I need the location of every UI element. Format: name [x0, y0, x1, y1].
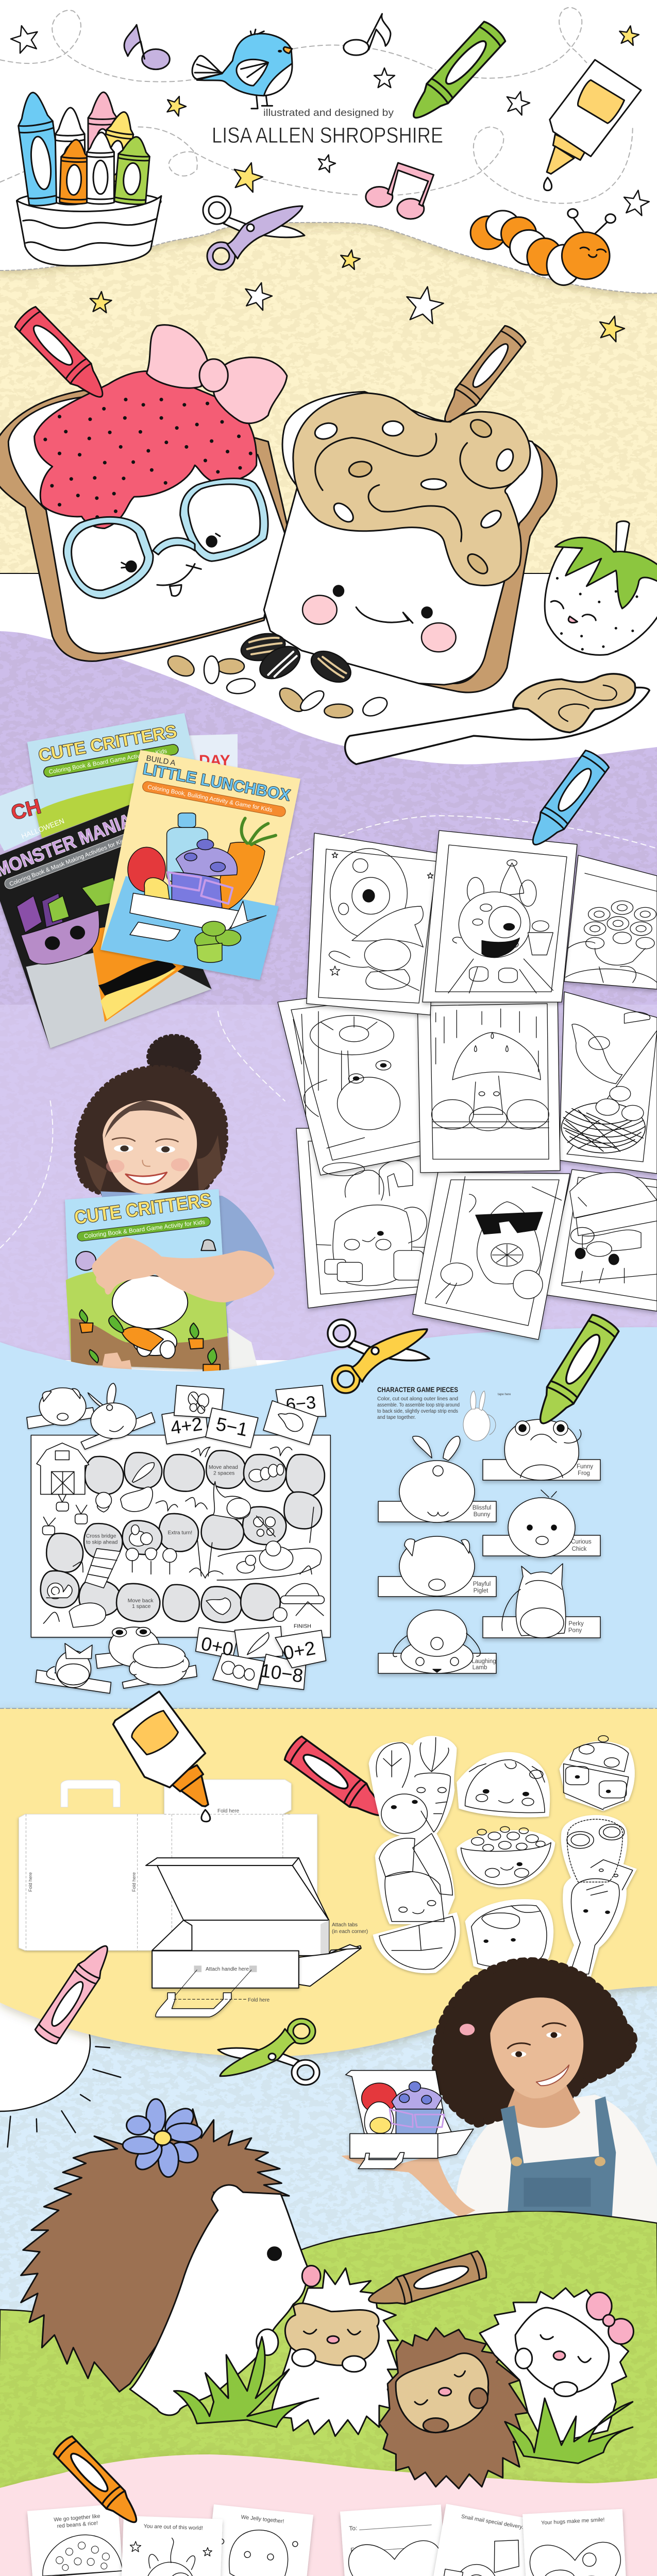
board text labels: Move ahead — [209, 1465, 238, 1470]
strawberry — [545, 547, 657, 655]
photo: girl with lunchbox — [342, 1961, 657, 2225]
piece labels: Chick — [572, 1546, 587, 1552]
light blue sky panel — [0, 1958, 657, 2329]
piece labels: Funny — [577, 1464, 593, 1470]
math cards top — [162, 1385, 326, 1448]
piece labels: Frog — [578, 1470, 590, 1477]
piece: laughing lamb — [378, 1610, 496, 1673]
icon: green scissors — [218, 2019, 319, 2085]
valentine card: bowl of beans: We go together like — [54, 2513, 100, 2523]
book title: christmas fragment: CH — [9, 795, 43, 825]
shirt — [454, 2095, 657, 2225]
piece labels: Lamb — [473, 1665, 487, 1671]
hair — [436, 1961, 633, 2124]
board text labels: Extra turn! — [167, 1530, 192, 1536]
nuts on spread — [311, 418, 516, 575]
dashed wave edge — [0, 223, 657, 293]
photo: girl holding coloring book — [65, 1036, 275, 1372]
net fold labels — [28, 1808, 240, 1892]
white sun — [0, 1974, 121, 2147]
hedgehog family — [21, 2099, 633, 2488]
box annotations: Fold here — [248, 1997, 270, 2003]
game character: lamb — [122, 1644, 197, 1688]
board background — [31, 1435, 330, 1637]
card: 6-3 — [276, 1385, 326, 1416]
hair tie — [460, 2024, 475, 2036]
skirt — [228, 1328, 258, 1369]
board game sheet — [27, 1383, 330, 1637]
board text labels: Move back — [128, 1598, 154, 1604]
books: stacked covers — [0, 713, 238, 1048]
board text labels: FINISH — [294, 1624, 311, 1630]
board text labels: 2 spaces — [213, 1471, 234, 1477]
spread swirls — [315, 434, 511, 541]
instructions text: and tape together. — [377, 1414, 416, 1420]
board text labels: Cross bridge — [86, 1534, 116, 1539]
box annotations: Attach tabs — [332, 1922, 358, 1928]
strawberry jam — [35, 371, 257, 529]
lighter purple lower wash — [0, 1005, 657, 1360]
icon: pink double music note — [366, 163, 434, 219]
crayon: orange — [52, 2434, 145, 2530]
blue flower — [123, 2099, 202, 2177]
table edge line — [0, 573, 657, 574]
board text labels — [52, 1464, 311, 1630]
piece labels: Pony — [568, 1628, 582, 1634]
board line art — [37, 1443, 324, 1628]
valentine card: jellyfish: We Jelly together! — [241, 2514, 284, 2524]
stars — [8, 22, 651, 343]
pop tart — [591, 1860, 633, 1890]
valentine card: monster — [119, 2516, 231, 2576]
book title: monster mania: HALLOWEEN — [20, 817, 65, 840]
piece labels: Playful — [473, 1581, 491, 1587]
piece labels: Curious — [571, 1539, 592, 1545]
icon: glue bottle big — [113, 1691, 210, 1822]
book title: little lunchbox: BUILD A — [145, 754, 176, 768]
grass and basket — [43, 1447, 312, 1623]
shirt — [100, 1191, 275, 1333]
game character: bunny with band — [81, 1383, 155, 1449]
seeds and nuts — [163, 632, 649, 764]
valentine card: bowl of beans: red beans & rice! — [57, 2520, 98, 2530]
face — [490, 1997, 583, 2098]
game pieces column — [378, 1419, 600, 1673]
toast with glasses — [567, 1819, 622, 1882]
box annotations: Attach handle here — [206, 1967, 249, 1972]
icon: lilac music note — [124, 25, 170, 70]
piece labels — [471, 1464, 593, 1671]
held book — [65, 1189, 229, 1370]
book text: cute critters on held book — [73, 1189, 213, 1242]
arm and hand — [342, 2155, 476, 2217]
card: 6-3: 6−3 — [285, 1393, 317, 1415]
flowers and bridge — [85, 1507, 314, 1588]
dashed divider blue to yellow — [0, 1708, 657, 1709]
drumstick — [570, 1878, 619, 1974]
crayon: brown on toast — [436, 324, 527, 430]
sticker backs — [369, 1736, 637, 1977]
valentine card: jellyfish — [200, 2504, 328, 2576]
lunchbox paper net — [19, 1780, 317, 1951]
book title: cute critters: CUTE CRITTERS — [37, 721, 178, 766]
cream background top section — [0, 206, 657, 582]
green hill — [0, 2211, 657, 2530]
crayon: red big — [283, 1735, 392, 1825]
card texts bottom: 0+2 — [281, 1637, 317, 1664]
game character: pig with band — [27, 1388, 95, 1429]
mother hedgehog spines — [21, 2109, 289, 2392]
piece: funny frog — [483, 1419, 600, 1480]
valentine card: blank heart: From: — [350, 2546, 367, 2554]
jam seeds — [45, 400, 250, 517]
hen, chick and puppy — [96, 1482, 250, 1519]
3d lunchbox model — [146, 1858, 329, 1956]
valentine cards group one — [27, 2504, 328, 2576]
coloring sheet: santa — [545, 1170, 657, 1311]
net fold labels: Fold here — [28, 1872, 33, 1892]
icon: top decorations (notes, bird, glue, caterpillar, cup) — [17, 14, 434, 219]
icon: green crayon — [405, 20, 507, 128]
crayon: big green — [529, 1313, 620, 1432]
coloring sheets collage — [278, 831, 657, 1340]
toast pair illustration — [0, 325, 657, 692]
pink bow on baby — [586, 2292, 633, 2344]
grass tufts — [174, 2337, 633, 2463]
icon: yellow scissors — [328, 1319, 429, 1393]
pill: held book subtitle: Coloring Book & Board Game Activity for Kids — [83, 1218, 206, 1240]
net main panel — [19, 1780, 317, 1951]
valentine card: bowl of beans — [27, 2504, 129, 2576]
crayon: red on toast — [13, 305, 113, 405]
purple background panel — [0, 631, 657, 1360]
coloring sheet: party monster — [423, 831, 577, 1002]
sticker line art — [376, 1736, 633, 1974]
left toast bread — [8, 397, 285, 653]
instructions text: assemble. To assemble loop strip around — [377, 1402, 460, 1408]
icon: lilac scissors — [203, 196, 305, 270]
coloring sheet: cocoa mug — [296, 1128, 443, 1308]
food stickers — [369, 1736, 637, 1977]
carrots near barn — [43, 1502, 87, 1535]
right toast crust — [419, 442, 557, 692]
baby white hedgehog — [272, 2268, 398, 2436]
coloring sheet: frog — [278, 984, 421, 1176]
held mini lunchbox — [346, 2071, 474, 2168]
box annotations — [206, 1922, 368, 2003]
overalls — [501, 2096, 616, 2221]
icon: cup of crayons back rim — [17, 191, 161, 212]
card texts bottom: 10−8 — [259, 1660, 305, 1687]
crayon: pink — [34, 1939, 116, 2046]
face — [103, 1100, 197, 1194]
book: monster mania cover — [0, 804, 212, 1048]
pill: cute critters subtitle — [43, 743, 179, 778]
radish and carrot — [376, 1737, 450, 1832]
instructions text: to back side, slightly overlap strip ends — [377, 1408, 458, 1414]
diagram: bunny assembly — [463, 1391, 511, 1441]
title credit line: illustrated and designed by — [263, 108, 394, 118]
white top panel with wavy edge — [0, 0, 657, 293]
pink panel — [0, 2454, 657, 2576]
barn — [37, 1443, 89, 1494]
monster mania pot — [17, 877, 122, 964]
icon: caterpillar — [470, 209, 615, 285]
piece: curious chick — [483, 1490, 600, 1557]
coloring sheet: curly angel — [564, 855, 657, 989]
book title: little lunchbox: LITTLE LUNCHBOX — [142, 759, 292, 804]
spoon with peanut butter — [345, 674, 649, 764]
icon: glue bottle — [544, 60, 641, 191]
neck — [505, 2084, 580, 2128]
baby brown hedgehog — [379, 2328, 528, 2488]
snail and bunny — [46, 1583, 231, 1628]
instructions text: Color, cut out along outer lines and — [377, 1396, 458, 1402]
board lower pieces and cards — [36, 1626, 326, 1693]
coloring sheet: bird nest — [559, 992, 657, 1174]
yellow panel — [0, 1708, 657, 2057]
valentine card: snail mail: Snail mail special delivery... — [461, 2514, 527, 2531]
card: 5-1: 5−1 — [214, 1413, 250, 1440]
character game pieces heading: CHARACTER GAME PIECES — [377, 1385, 458, 1394]
valentine card: snail mail — [424, 2504, 552, 2576]
diagram: bunny assembly: tape here — [498, 1393, 511, 1396]
valentine card: hugging heart: Your hugs make me smile! — [541, 2517, 605, 2526]
white table surface — [0, 573, 657, 779]
mother hedgehog face — [130, 2185, 308, 2415]
left toast crust — [0, 391, 289, 661]
carrot and bugs — [97, 1463, 284, 1546]
valentine card: monster: You are out of this world! — [144, 2523, 203, 2531]
taco — [465, 1760, 545, 1813]
crayon: brown on hill — [365, 2250, 488, 2314]
piece labels: Perky — [568, 1621, 584, 1627]
valentine card: blank heart: To: — [349, 2524, 358, 2532]
piece labels: Piglet — [474, 1588, 488, 1594]
title: author name: LISA ALLEN SHROPSHIRE — [212, 123, 443, 148]
book: snow cover left — [0, 783, 44, 851]
dashed flight paths — [0, 7, 633, 204]
baby white hedgehog with bow — [480, 2288, 629, 2445]
orange slices — [379, 1916, 455, 1970]
peanut butter spread — [293, 393, 530, 585]
game path stones — [41, 1451, 325, 1622]
piece: playful piglet — [378, 1536, 496, 1597]
arm and hand — [92, 1237, 275, 1302]
pill: lunchbox subtitle: Coloring Book, Building Activity & Game for Kids — [147, 784, 273, 814]
box annotations: (in each corner) — [332, 1929, 368, 1935]
icon: crayons in cup — [14, 90, 151, 207]
lunchbox purple glasses — [167, 872, 232, 904]
book title: little lunchbox — [142, 754, 292, 818]
book: cute critters cover — [27, 713, 201, 838]
dashed white path — [0, 816, 657, 1274]
instructions text — [377, 1396, 460, 1420]
book: little lunchbox cover — [100, 750, 300, 980]
sunflower seeds — [234, 632, 358, 684]
card: 5-1 — [206, 1408, 258, 1448]
right toast face — [302, 596, 456, 652]
hair — [76, 1036, 227, 1196]
book text: cute critters on held book: CUTE CRITTERS — [73, 1189, 213, 1228]
net fold labels: Fold here — [217, 1808, 240, 1814]
piece: perky pony — [483, 1564, 600, 1638]
cereal bowl — [461, 1843, 551, 1885]
valentine card: blank heart — [340, 2504, 450, 2576]
card: 4+2 — [162, 1408, 208, 1444]
crayon: blue — [523, 749, 610, 853]
card: butterfly — [174, 1385, 224, 1418]
piece: blissful bunny — [378, 1436, 496, 1522]
board text labels: START — [52, 1464, 71, 1469]
right toast bread — [264, 392, 542, 685]
card: 4+2: 4+2 — [169, 1413, 204, 1438]
pill: lunchbox subtitle — [142, 781, 287, 818]
piece labels: Laughing — [471, 1658, 496, 1665]
nut crumbs — [163, 655, 392, 718]
card texts bottom — [199, 1633, 317, 1687]
blue background panel — [0, 1327, 657, 1710]
pink bow — [147, 325, 207, 388]
lunchbox items — [167, 827, 208, 883]
blueberry cup — [564, 1742, 629, 1810]
coloring sheet: mushroom rain — [417, 992, 560, 1173]
coloring sheet: witch — [307, 833, 438, 1015]
valentine cards group two — [340, 2504, 637, 2576]
glasses toast face — [126, 536, 216, 572]
icon: white music note — [344, 14, 391, 55]
piece labels: Bunny — [474, 1512, 491, 1518]
piece labels: Blissful — [473, 1505, 491, 1511]
sushi — [471, 1905, 547, 1968]
net fold labels: Fold here — [131, 1872, 137, 1892]
icon: crayon cup — [17, 196, 161, 266]
pill: cute critters subtitle: Coloring Book & Board Game Activity for Kids — [48, 748, 167, 775]
coloring sheet: avocado with sunglasses — [413, 1172, 570, 1340]
card texts bottom: 0+0 — [199, 1633, 235, 1660]
math cards bottom — [196, 1626, 326, 1690]
pill: monster mania subtitle: Coloring Book & Mask Making Activities for Kids — [9, 837, 128, 888]
net handle — [61, 1780, 120, 1807]
blue glasses — [64, 478, 268, 598]
card: bird — [263, 1401, 318, 1445]
bread and cheese — [379, 1834, 452, 1895]
valentine card: hugging heart — [523, 2509, 637, 2576]
book: back white cover — [189, 734, 238, 801]
game character: pony — [36, 1643, 111, 1693]
icon: blue bird — [192, 29, 292, 109]
game character: frog — [95, 1627, 159, 1668]
book title: day fragment: DAY — [199, 752, 230, 769]
ducks and pond — [217, 1541, 321, 1580]
board text labels: to skip ahead — [86, 1539, 118, 1545]
board text labels: 1 space — [132, 1604, 151, 1609]
